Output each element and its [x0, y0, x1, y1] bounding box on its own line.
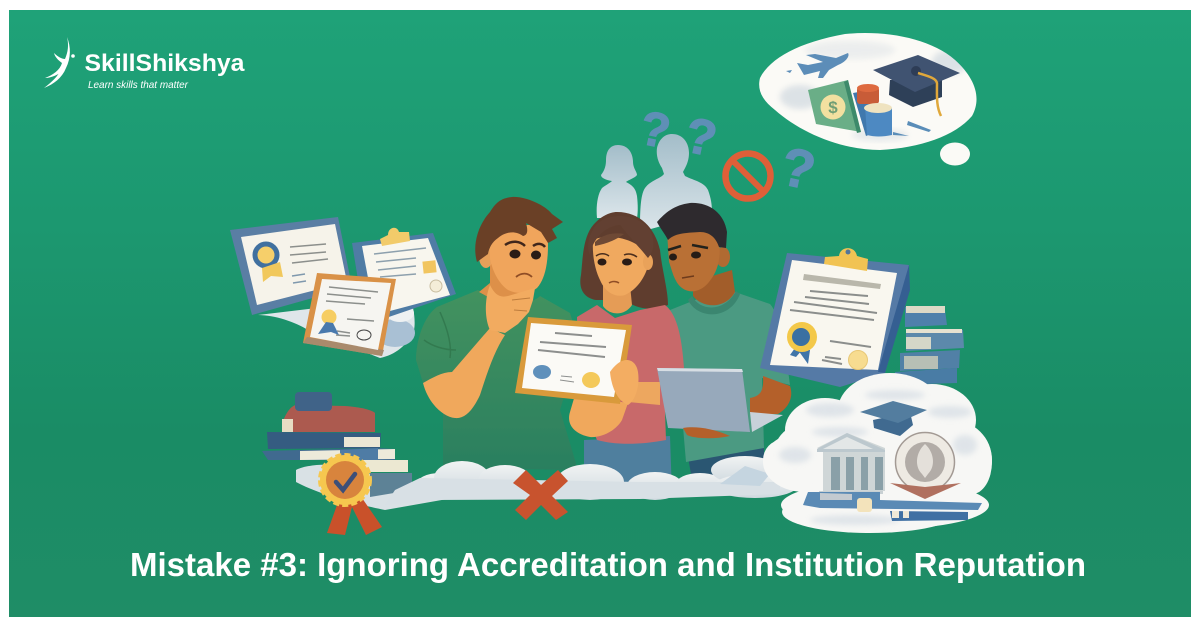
cloud base — [385, 478, 780, 505]
silhouettes behind students — [597, 134, 712, 232]
paper — [770, 260, 897, 370]
forearm — [423, 328, 505, 418]
book: third — [262, 448, 395, 460]
pouch — [295, 392, 332, 411]
certificate held — [515, 317, 632, 404]
clip — [824, 248, 868, 271]
bar: book base — [803, 492, 982, 521]
illustration — [230, 33, 992, 535]
bubble shading — [780, 41, 968, 141]
shirt — [416, 290, 580, 470]
neck — [603, 285, 632, 313]
silhouette: woman — [597, 145, 638, 218]
red X — [513, 470, 568, 520]
face — [490, 225, 548, 293]
face — [667, 232, 720, 291]
question marks: ? — [680, 106, 722, 168]
sleeve shading — [424, 312, 456, 358]
silhouette: man — [640, 134, 712, 232]
right arm — [750, 376, 791, 414]
institution cloud — [763, 373, 992, 533]
clipboard board — [760, 253, 909, 387]
text lines — [790, 291, 877, 364]
ribbons — [327, 498, 382, 535]
thought puff — [940, 142, 970, 166]
left forearm — [569, 395, 628, 437]
certificate: blue framed — [230, 217, 352, 315]
rosette — [787, 322, 817, 364]
rosette — [320, 455, 370, 505]
icon: graduation cap — [873, 55, 960, 116]
left student — [416, 197, 580, 470]
shirt — [670, 292, 790, 462]
cloud mass — [763, 373, 992, 533]
thought bubble — [759, 33, 977, 166]
neck — [693, 270, 735, 305]
ear — [716, 247, 730, 267]
icon: blue cup — [864, 103, 892, 136]
bottom clouds — [385, 456, 797, 505]
question marks — [635, 102, 821, 202]
title: Mistake #3: Ignoring Accreditation and Institution Reputation — [130, 546, 1086, 583]
icon: green passport: $ — [828, 98, 838, 117]
icon: green passport — [808, 80, 861, 133]
book: dark blue bottom — [370, 473, 412, 497]
dark hair — [657, 203, 727, 248]
certificate: clipboard — [352, 228, 456, 320]
middle student — [569, 212, 684, 495]
brown hair — [475, 197, 563, 262]
icon: temple — [817, 433, 885, 494]
face — [593, 237, 650, 296]
check — [336, 474, 355, 490]
cloud behind left certificates — [258, 297, 415, 358]
ear — [643, 254, 653, 270]
logo: SkillShikshya — [44, 37, 245, 91]
jeans — [686, 440, 764, 480]
hand on certificate — [610, 360, 639, 405]
icon: blue book behind — [853, 90, 880, 136]
lower hand — [683, 427, 730, 438]
icon: prohibition sign — [726, 154, 770, 198]
icon: pen — [893, 121, 931, 136]
certificate: right clipboard — [760, 248, 964, 387]
shirt — [577, 305, 684, 444]
hair back — [580, 212, 668, 309]
question marks: ? — [635, 102, 675, 159]
icon: university seal — [890, 432, 961, 499]
icon: leaping figure — [44, 37, 75, 88]
seal — [848, 350, 868, 370]
logo tagline: Learn skills that matter — [88, 79, 188, 91]
brows, eyes, mouth — [505, 242, 545, 277]
right student — [657, 203, 791, 480]
laptop — [657, 368, 783, 438]
brows, eyes, mouth — [596, 254, 637, 283]
cloud lobes — [416, 456, 797, 500]
collar — [688, 291, 740, 314]
bubble cloud — [759, 33, 977, 150]
book: second — [267, 432, 381, 449]
icon: red cylinder — [857, 84, 879, 104]
cloud shadows — [779, 390, 977, 525]
icon: mortarboard — [860, 401, 927, 436]
book: cream pages — [363, 460, 408, 472]
jeans — [584, 436, 672, 495]
right forearm — [628, 382, 660, 405]
heading bar — [803, 274, 881, 289]
books right — [895, 306, 964, 385]
logo wordmark: SkillShikshya — [84, 50, 245, 77]
badge: check rosette — [320, 455, 382, 535]
book: red — [282, 405, 375, 432]
question marks: ? — [776, 136, 821, 202]
cloud under books — [296, 465, 470, 510]
icon: airplane — [786, 53, 849, 78]
neck — [479, 262, 530, 305]
hand on chin — [486, 285, 535, 333]
ear — [479, 246, 493, 268]
brows and eyes — [668, 245, 708, 278]
clipboard clip — [380, 228, 410, 246]
certificate: orange framed — [303, 273, 396, 356]
fringe — [588, 216, 654, 258]
stack of books left — [262, 392, 470, 510]
